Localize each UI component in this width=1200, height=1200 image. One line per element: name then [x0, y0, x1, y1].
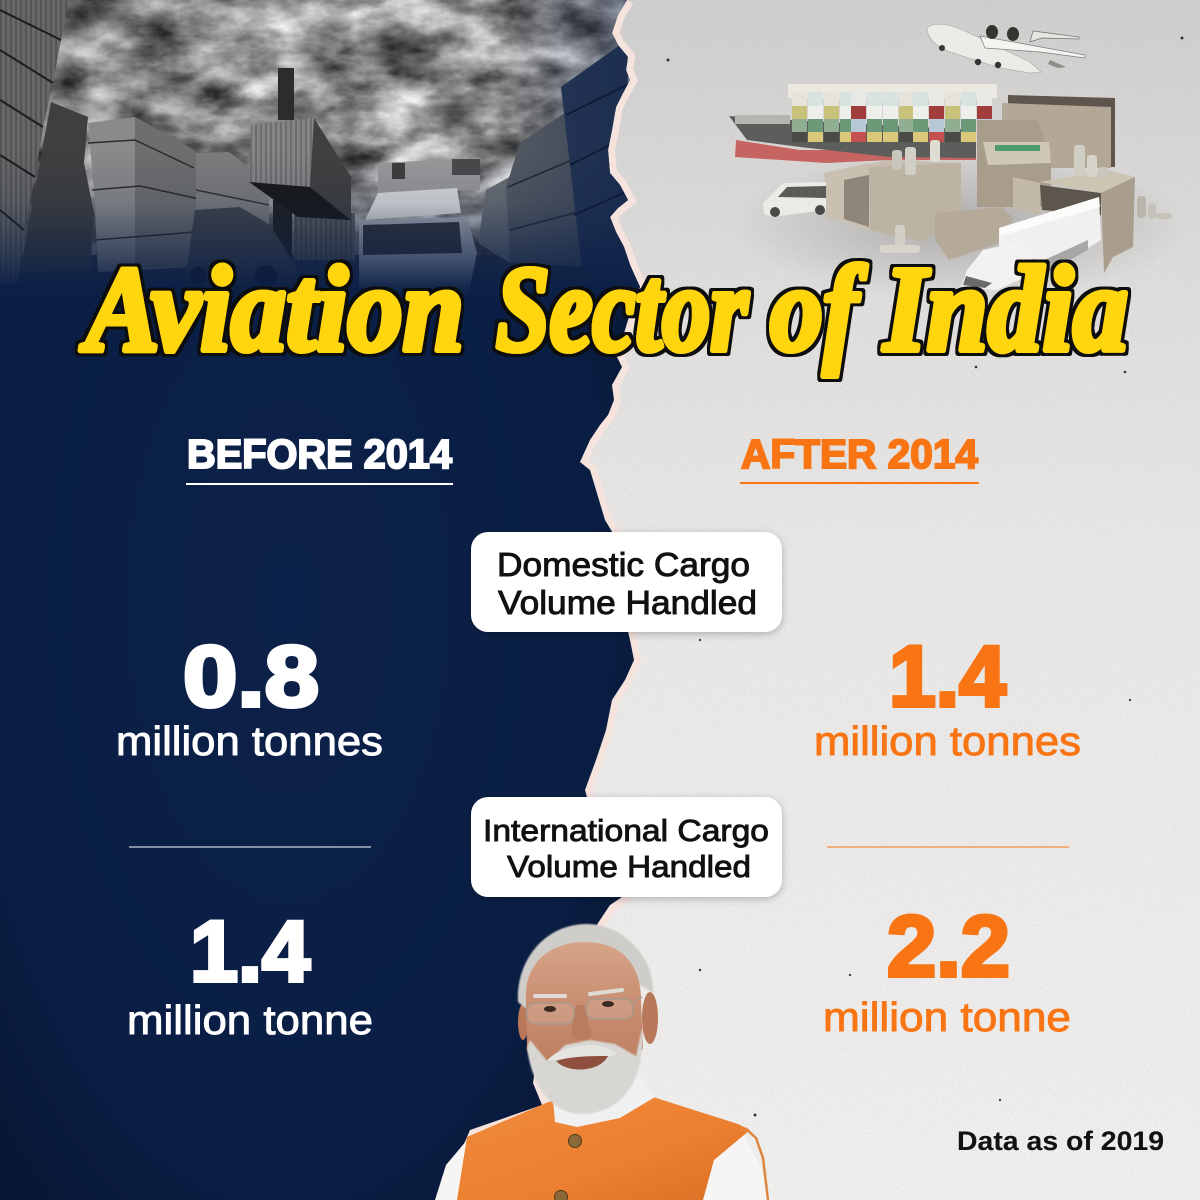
main title — [80, 242, 1128, 377]
glasses — [527, 997, 642, 1024]
yard ground — [20, 255, 640, 289]
stat: international after — [823, 899, 1071, 1040]
center carton — [977, 120, 1051, 215]
stat: domestic before: 0.8 — [183, 629, 319, 725]
truck cab — [359, 188, 477, 286]
heading: before 2014: BEFORE 2014 — [187, 431, 452, 477]
stat: domestic before — [116, 629, 383, 764]
navy field — [0, 0, 640, 1200]
stat: domestic after: million tonnes — [814, 718, 1081, 764]
navy fade over photo — [0, 166, 640, 300]
back carton — [1008, 95, 1115, 167]
stat: domestic before: million tonnes — [116, 718, 383, 764]
right container stacks — [478, 40, 632, 270]
stat: international before — [127, 904, 373, 1043]
stat: international before: million tonne — [127, 997, 373, 1043]
vest outer trim — [745, 1128, 768, 1200]
divider left — [129, 846, 371, 848]
label pill: domestic cargo: Domestic Cargo — [497, 546, 750, 583]
stat: international after: 2.2 — [887, 899, 1010, 995]
photo: container yard in greyscale — [0, 0, 640, 301]
torn paper edge highlight — [440, 0, 640, 1200]
heading: after 2014: AFTER 2014 — [741, 431, 978, 477]
orange vest — [457, 1097, 750, 1200]
stat: international before: 1.4 — [190, 904, 310, 1000]
main title: Aviation — [80, 242, 464, 377]
beard — [527, 1028, 642, 1114]
divider right — [827, 846, 1069, 848]
right carton — [1040, 170, 1135, 273]
label pill: domestic cargo — [471, 532, 782, 632]
ground shadow — [730, 150, 1190, 300]
left navy panel with torn edge — [0, 0, 640, 1200]
icon: cargo plane — [927, 24, 1085, 73]
eyes and nose — [544, 1001, 614, 1012]
main title: India — [882, 242, 1128, 377]
buttons — [568, 1134, 582, 1148]
eyebrows — [535, 990, 622, 996]
back stack and far containers — [294, 158, 480, 260]
low carton — [935, 207, 1013, 260]
stat: domestic after — [814, 629, 1081, 764]
stat: domestic after: 1.4 — [889, 629, 1006, 725]
icon: white truck — [961, 197, 1101, 290]
white kurta shoulders — [435, 1100, 770, 1200]
hair — [518, 924, 653, 1008]
forklift with hanging container — [184, 68, 351, 287]
ears — [642, 992, 658, 1044]
icon: van — [763, 182, 826, 217]
footnote: Data as of 2019 — [957, 1126, 1164, 1156]
left carton — [824, 160, 961, 242]
label pill: domestic cargo: Volume Handled — [498, 584, 757, 621]
portrait: man with white beard and orange vest — [435, 924, 770, 1200]
label pill: international cargo: International Cargo — [483, 813, 769, 848]
cargo collage: ship, plane, boxes, truck — [729, 24, 1190, 300]
left container stacks — [0, 0, 269, 283]
main title: Sector — [496, 242, 749, 377]
collar — [553, 1075, 655, 1127]
cloudy sky — [0, 0, 640, 262]
icon: coin stacks — [880, 140, 1172, 253]
face — [526, 942, 643, 1085]
icon: container ship — [729, 84, 997, 163]
label pill: international cargo: Volume Handled — [507, 849, 751, 884]
mustache and lips — [546, 1045, 617, 1062]
main title: of — [770, 242, 867, 377]
label pill: international cargo — [471, 797, 782, 897]
stat: international after: million tonne — [823, 994, 1071, 1040]
